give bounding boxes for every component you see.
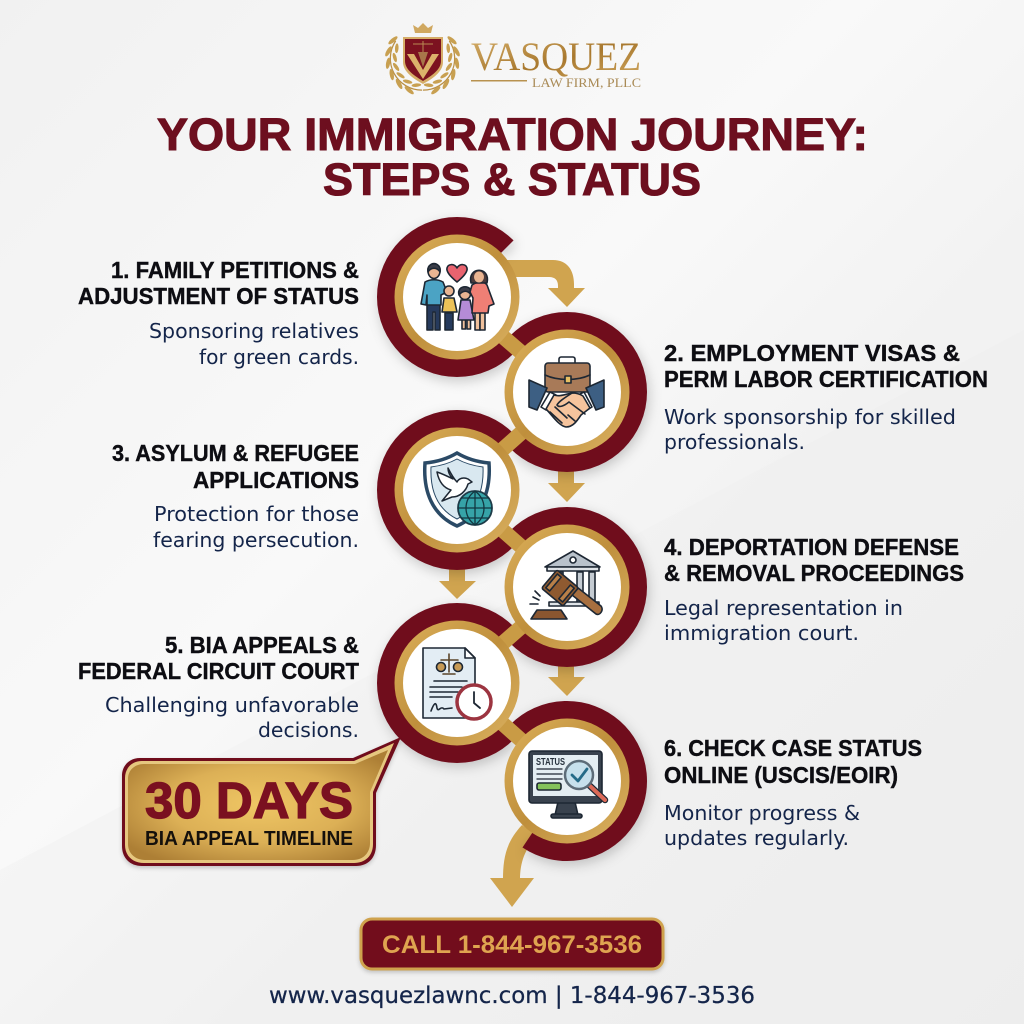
icon: laurel wreath bbox=[384, 35, 461, 96]
maroon C rings bbox=[386, 226, 638, 852]
step 6 node bbox=[504, 718, 630, 844]
step 4 text: Legal representation in bbox=[664, 596, 903, 620]
logo: Vasquez Law Firm bbox=[384, 23, 641, 96]
icon: legal document and clock bbox=[423, 648, 491, 719]
icon: monitor with status check: STATUS bbox=[536, 757, 565, 768]
step 3 node bbox=[394, 428, 520, 552]
icon: courthouse and gavel bbox=[530, 551, 602, 619]
step 1 node bbox=[394, 234, 520, 360]
step 5 text: 5. BIA APPEALS & bbox=[165, 632, 359, 658]
step 4 text: & REMOVAL PROCEEDINGS bbox=[664, 560, 964, 586]
logo wordmark: VASQUEZ bbox=[471, 34, 641, 79]
arrow: step 2 to 4 bbox=[548, 470, 585, 502]
step 3 text: 3. ASYLUM & REFUGEE bbox=[112, 440, 359, 466]
arrow: step 4 to 6 bbox=[548, 665, 585, 696]
arrow: step 6 to call bbox=[490, 825, 538, 907]
arrow: step 3 to 5 bbox=[439, 568, 476, 599]
step 6 text: 6. CHECK CASE STATUS bbox=[664, 735, 922, 761]
call button label: CALL 1-844-967-3536 bbox=[382, 931, 642, 959]
step 6 text: Monitor progress & bbox=[664, 801, 860, 825]
logo subtitle: LAW FIRM, PLLC bbox=[532, 75, 641, 90]
step 2 text: Work sponsorship for skilled bbox=[664, 405, 956, 429]
step 5 text: Challenging unfavorable bbox=[105, 693, 359, 717]
step 3 text: Protection for those bbox=[154, 502, 359, 526]
step 2 text: professionals. bbox=[664, 430, 805, 454]
call button bbox=[361, 919, 663, 969]
callout: 30 days bbox=[122, 737, 401, 866]
step 4 text bbox=[664, 534, 964, 645]
callout caption: BIA APPEAL TIMELINE bbox=[145, 827, 353, 850]
step 1 text: for green cards. bbox=[199, 345, 359, 369]
icon: shield bbox=[403, 37, 443, 84]
step 1 text: ADJUSTMENT OF STATUS bbox=[78, 283, 359, 309]
title: STEPS & STATUS bbox=[323, 154, 701, 205]
step 5 text: FEDERAL CIRCUIT COURT bbox=[78, 658, 359, 684]
step 5 text bbox=[78, 632, 359, 742]
step 6 text bbox=[664, 735, 922, 850]
step 6 text: updates regularly. bbox=[664, 826, 849, 850]
step 1 text bbox=[78, 257, 359, 369]
icon: shield with dove and globe bbox=[425, 453, 492, 526]
step 4 node bbox=[504, 524, 630, 650]
step 3 text: fearing persecution. bbox=[153, 528, 359, 552]
icon: crown bbox=[413, 23, 433, 33]
step 4 text: immigration court. bbox=[664, 621, 859, 645]
step 1 text: 1. FAMILY PETITIONS & bbox=[111, 257, 359, 283]
step 5 text: decisions. bbox=[258, 718, 359, 742]
step 2 text bbox=[664, 340, 988, 454]
step 2 node bbox=[504, 330, 630, 454]
callout number: 30 DAYS bbox=[145, 772, 353, 829]
icon: handshake and briefcase bbox=[529, 357, 604, 427]
step 2 text: PERM LABOR CERTIFICATION bbox=[664, 366, 988, 392]
title: YOUR IMMIGRATION JOURNEY: bbox=[157, 109, 868, 160]
step 6 text: ONLINE (USCIS/EOIR) bbox=[664, 762, 898, 788]
flow arrows bbox=[439, 260, 585, 907]
footer contact line: www.vasquezlawnc.com | 1-844-967-3536 bbox=[269, 983, 755, 1009]
arrow: step 1 to 2 bbox=[505, 260, 585, 307]
step 3 text bbox=[112, 440, 359, 552]
step 3 text: APPLICATIONS bbox=[193, 467, 359, 493]
step 2 text: 2. EMPLOYMENT VISAS & bbox=[664, 340, 960, 366]
step 5 node bbox=[394, 620, 520, 746]
connectors bbox=[457, 297, 567, 781]
title bbox=[157, 109, 868, 205]
step 4 text: 4. DEPORTATION DEFENSE bbox=[664, 534, 959, 560]
icon: family bbox=[421, 264, 494, 330]
step 1 text: Sponsoring relatives bbox=[149, 319, 359, 343]
